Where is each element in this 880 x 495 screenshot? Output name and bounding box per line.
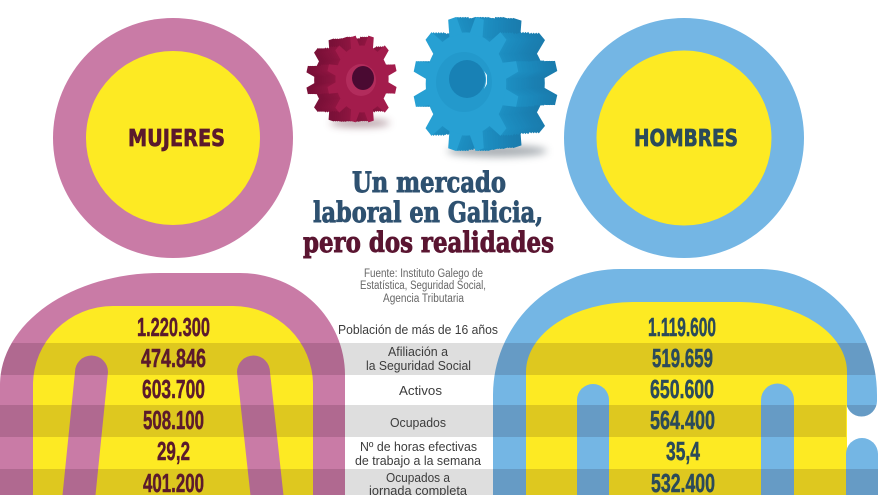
title: laboral en Galicia, [313,196,543,229]
icon: red gear [306,35,397,127]
row labels: Ocupados a [386,470,451,485]
row shading over figures [0,343,880,495]
icon: blue gear [413,16,558,157]
circle: hombres [564,18,804,258]
values: mujeres: 29,2 [157,436,190,466]
source text [360,268,486,305]
circle: mujeres [53,18,293,258]
centre grey row bands [338,343,518,495]
row labels [338,322,498,495]
values: hombres: 35,4 [666,436,700,466]
source text: Agencia Tributaria [383,293,465,305]
row labels: Activos [399,383,443,398]
title [303,166,554,259]
label: hombres: HOMBRES [634,126,738,152]
figure: mujeres arch [0,273,345,495]
title: pero dos realidades [303,226,554,259]
values: mujeres: 603.700 [142,374,205,404]
values: mujeres: 508.100 [143,405,204,435]
values: hombres: 1.119.600 [648,312,716,342]
values: hombres: 650.600 [650,374,714,404]
values: hombres [648,312,716,495]
values: hombres: 564.400 [650,405,715,435]
values: hombres: 519.659 [652,343,713,373]
row labels: Ocupados [390,415,446,430]
source text: Fuente: Instituto Galego de [364,268,483,280]
row labels: de trabajo a la semana [355,453,482,468]
values: mujeres: 1.220.300 [137,312,210,342]
values: mujeres [137,312,210,495]
row labels: Población de más de 16 años [338,322,498,337]
row labels: Afiliación a [388,344,449,359]
row labels: Nº de horas efectivas [360,439,477,454]
label: mujeres: MUJERES [128,126,225,152]
row labels: la Seguridad Social [366,358,471,373]
source text: Estatística, Seguridad Social, [360,280,486,292]
figure: hombres arch [493,269,878,495]
values: mujeres: 474.846 [141,343,206,373]
title: Un mercado [352,166,506,199]
